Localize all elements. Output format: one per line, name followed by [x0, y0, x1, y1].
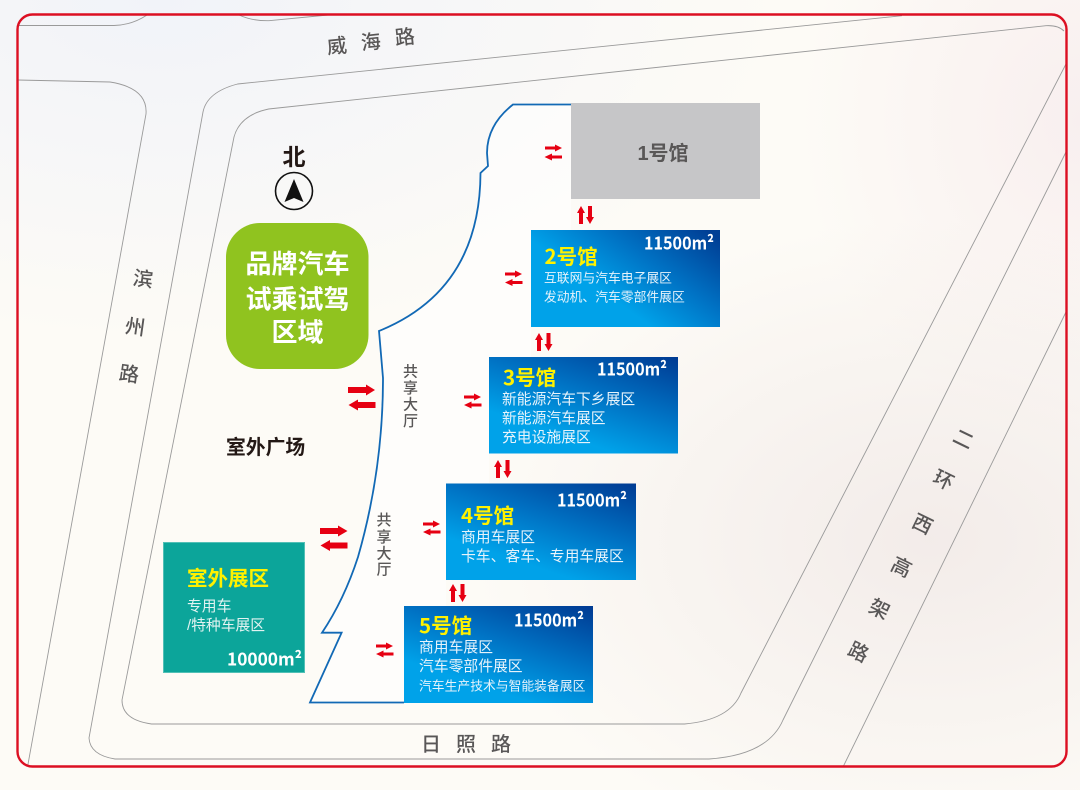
panel: test drive area: 试乘试驾 — [245, 284, 350, 314]
panel: outdoor exhibition: /特种车展区 — [187, 617, 265, 634]
road label: 滨州路: 路 — [118, 362, 141, 387]
road label: 二环西高架路: 二 — [949, 426, 977, 454]
panel: hall 5: 商用车展区 — [419, 639, 493, 656]
venue outline stroke — [310, 104, 571, 702]
road label: 日照路 — [421, 733, 511, 756]
arrows: hall 3 to hall 4 — [494, 460, 512, 478]
road label: 日照路: 日 — [421, 734, 441, 756]
panel: hall 4 — [446, 484, 636, 580]
compass north: 北 — [282, 144, 306, 170]
road label: 日照路: 路 — [491, 733, 511, 756]
panel: outdoor exhibition — [164, 542, 304, 672]
road label: 威海路: 威 — [326, 34, 348, 59]
arrows: large plaza lower — [320, 526, 348, 551]
road label: 威海路 — [326, 25, 416, 59]
road label: 日照路: 照 — [456, 734, 476, 756]
road label: 二环西高架路: 路 — [844, 638, 872, 667]
road label: 二环西高架路: 架 — [865, 595, 893, 624]
label: shared hall upper: 享 — [403, 380, 418, 397]
panel: hall 2: 发动机、汽车零部件展区 — [544, 290, 685, 304]
panel: hall 4: 4号馆 — [461, 499, 514, 529]
panel: hall 3: 充电设施展区 — [502, 429, 591, 446]
panel: hall 2 — [531, 230, 720, 327]
panel: hall 3 — [489, 356, 678, 454]
road label: 滨州路: 滨 — [132, 267, 155, 292]
road label: 二环西高架路: 西 — [908, 511, 936, 539]
panel: outdoor exhibition: 专用车 — [187, 598, 231, 615]
panel: hall 4: 商用车展区 — [461, 529, 535, 546]
panel: outdoor exhibition: 室外展区 — [187, 566, 269, 590]
panel: hall 2: 2号馆 — [544, 240, 598, 270]
panel: test drive area: 区域 — [271, 318, 324, 348]
label: shared hall upper: 大 — [403, 396, 418, 414]
panel: hall 5: 11500m² — [514, 608, 584, 632]
road label: 二环西高架路 — [844, 426, 977, 667]
label: shared hall lower — [376, 512, 392, 578]
panel: hall 4: 11500m² — [557, 488, 627, 512]
arrows: hall 4 to hall 5 — [449, 584, 466, 602]
label: shared hall lower: 共 — [376, 512, 392, 529]
panel: outdoor exhibition: 10000m² — [227, 646, 302, 672]
panel: hall 5 — [404, 606, 593, 703]
label: shared hall upper: 厅 — [403, 413, 418, 430]
road label: 威海路: 路 — [394, 25, 416, 50]
panel: hall 3: 3号馆 — [503, 361, 556, 391]
label: shared hall lower: 厅 — [376, 562, 392, 578]
panel: test drive area — [226, 223, 368, 369]
arrows: hall 5 entrance — [376, 642, 394, 658]
arrows: hall 2 entrance — [505, 270, 522, 286]
panel: hall 3: 新能源汽车展区 — [502, 410, 606, 427]
road label: 威海路: 海 — [360, 30, 382, 55]
panel: hall 1: 1号馆 — [637, 142, 689, 165]
label: outdoor plaza: 室外广场 — [226, 436, 305, 459]
panel: hall 5: 汽车生产技术与智能装备展区 — [419, 678, 586, 694]
compass north — [276, 144, 312, 210]
road label: 滨州路: 州 — [124, 316, 146, 340]
panel: hall 3: 11500m² — [597, 356, 667, 382]
label: shared hall lower: 大 — [376, 546, 392, 562]
label: shared hall upper — [403, 364, 418, 430]
arrows: hall 3 entrance — [464, 394, 482, 408]
road label: 二环西高架路: 环 — [929, 467, 957, 495]
panel: hall 4: 卡车、客车、专用车展区 — [461, 548, 624, 565]
label: shared hall upper: 共 — [403, 364, 418, 380]
panel: hall 2: 11500m² — [644, 230, 714, 256]
road label: 二环西高架路: 高 — [887, 553, 915, 582]
panel: hall 3: 新能源汽车下乡展区 — [502, 391, 635, 408]
panel: hall 1 — [571, 103, 760, 199]
arrows: hall 2 to hall 3 — [535, 333, 552, 351]
arrows: hall 1 to hall 2 — [577, 206, 594, 224]
panel: test drive area: 品牌汽车 — [245, 249, 350, 279]
arrows: hall 4 entrance — [423, 520, 440, 536]
venue outline fill — [310, 104, 571, 702]
panel: hall 5: 5号馆 — [419, 609, 472, 639]
panel: hall 5: 汽车零部件展区 — [419, 658, 523, 675]
arrows: large plaza upper — [348, 384, 376, 410]
road label: 滨州路 — [118, 267, 155, 387]
label: shared hall lower: 享 — [376, 529, 392, 546]
panel: hall 2: 互联网与汽车电子展区 — [544, 270, 672, 286]
arrows: hall 1 entrance — [544, 144, 562, 160]
